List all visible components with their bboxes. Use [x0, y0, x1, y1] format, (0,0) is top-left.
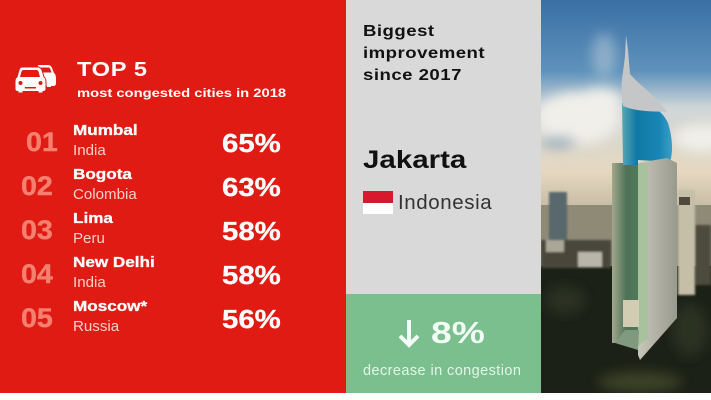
icon: two cars — [16, 65, 56, 92]
ground greenery — [541, 266, 711, 393]
city New Delhi: New Delhi — [73, 255, 155, 271]
heading: biggest improvement since 2017: since 2017 — [363, 67, 462, 84]
city: Jakarta: Jakarta — [363, 146, 466, 174]
row: Moscow — [21, 299, 281, 335]
main block — [638, 158, 677, 360]
subheading: most congested cities in 2018 — [77, 86, 286, 100]
heading: biggest improvement since 2017: improvement — [363, 45, 485, 62]
stacked rings — [623, 300, 639, 327]
distant city — [541, 205, 711, 268]
glass crown — [622, 103, 672, 165]
heading: biggest improvement since 2017: Biggest — [363, 23, 435, 40]
podium — [615, 330, 639, 350]
city Lima: Lima — [73, 211, 113, 227]
icon: down arrow — [398, 320, 420, 348]
left wing of tower — [612, 163, 638, 343]
value: 8%: 8% — [431, 315, 485, 350]
heading: biggest improvement since 2017 — [363, 23, 485, 84]
icon: Indonesian flag — [363, 191, 393, 214]
row: Mumbai — [26, 123, 281, 159]
clouds — [536, 33, 711, 152]
value 56%: 56% — [222, 304, 281, 334]
rank 05: 05 — [21, 303, 53, 333]
value 58%: 58% — [222, 216, 281, 246]
silver spire cap — [622, 35, 667, 112]
right building — [678, 190, 695, 295]
value 63%: 63% — [222, 172, 281, 202]
value 58%: 58% — [222, 260, 281, 290]
photo: Jakarta skyscraper — [541, 0, 711, 393]
mid-ground buildings — [541, 225, 711, 285]
city Bogota: Bogota — [73, 167, 132, 183]
country: Indonesia: Indonesia — [398, 191, 492, 214]
heading: top 5: TOP 5 — [77, 58, 148, 81]
country Russia: Russia — [73, 319, 119, 335]
country India: India — [73, 275, 106, 291]
rank 04: 04 — [21, 259, 53, 289]
row: New Delhi — [21, 255, 281, 291]
country India: India — [73, 143, 106, 159]
city Mumbai: Mumbal — [73, 123, 138, 139]
city Moscow: Moscow* — [73, 299, 147, 315]
row: Bogota — [21, 167, 281, 203]
panel: top 5 congested cities — [0, 0, 346, 393]
row: Lima — [21, 211, 281, 247]
rank 03: 03 — [21, 215, 53, 245]
country Peru: Peru — [73, 231, 105, 247]
green facade — [638, 163, 648, 346]
value 65%: 65% — [222, 128, 281, 158]
tree canopy highlights — [545, 286, 708, 392]
rank 02: 02 — [21, 171, 53, 201]
sky — [541, 0, 711, 215]
rank 01: 01 — [26, 127, 58, 157]
country Colombia: Colombia — [73, 187, 137, 203]
panel: biggest improvement — [346, 0, 541, 294]
panel: decrease callout — [346, 294, 541, 393]
left background tower — [548, 190, 568, 241]
caption: decrease in congestion — [363, 363, 521, 379]
